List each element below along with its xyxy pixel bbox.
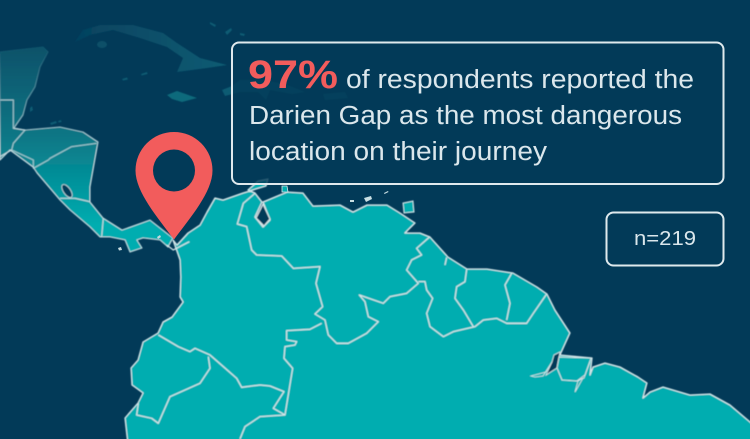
- map: Lake Maracaibo and estuary: [256, 204, 270, 226]
- map: Panama islands: [118, 235, 161, 250]
- text panel: [232, 42, 724, 184]
- map: country borders: [137, 193, 430, 439]
- sample size box: n=219: [634, 228, 696, 250]
- headline line two: Darien Gap as the most dangerous: [249, 102, 682, 130]
- icon: location pin: [136, 132, 212, 240]
- map: Caribbean islands: [30, 22, 348, 125]
- map: Netherlands Antilles dots: [282, 186, 388, 202]
- headline stat: 97%: [248, 53, 338, 97]
- headline line one: of respondents reported the: [346, 66, 694, 94]
- sample size box: [606, 212, 724, 266]
- map: Central America: [0, 47, 173, 252]
- headline line three: location on their journey: [249, 138, 547, 166]
- map: South America: [125, 179, 750, 439]
